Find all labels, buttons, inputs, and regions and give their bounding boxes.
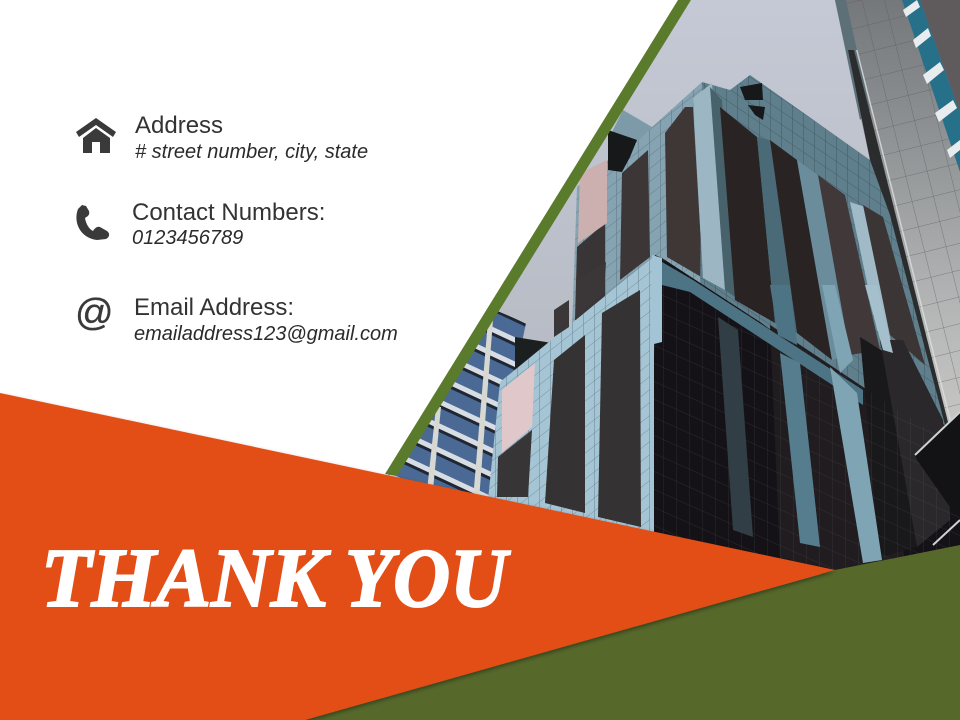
orange panel (0, 393, 835, 720)
title (41, 532, 511, 625)
lower tier, right face (650, 255, 960, 575)
lower right green panel (300, 545, 960, 720)
contact numbers text block: 0123456789 (132, 227, 243, 249)
upper tier, left face (572, 82, 702, 323)
icon: phone (76, 205, 109, 240)
title: THANK (41, 532, 331, 625)
icon: at sign: @ (75, 292, 114, 334)
address text block: Address (135, 112, 223, 139)
email text block: Email Address: (134, 294, 294, 321)
lower tier, left face (488, 255, 655, 560)
sky (388, 0, 870, 476)
email text block (134, 294, 398, 345)
address text block (135, 112, 368, 163)
left background building (380, 310, 552, 500)
contact numbers text block (132, 199, 325, 249)
right tower (835, 0, 960, 440)
building photograph (380, 0, 960, 575)
address text block: # street number, city, state (135, 141, 368, 163)
email text block: emailaddress123@gmail.com (134, 323, 398, 345)
title: YOU (345, 532, 511, 625)
upper tier, right face (693, 75, 945, 425)
dark canopy (915, 412, 960, 545)
green diagonal stripe (385, 0, 691, 476)
contact numbers text block: Contact Numbers: (132, 199, 325, 226)
icon: house (76, 118, 116, 153)
